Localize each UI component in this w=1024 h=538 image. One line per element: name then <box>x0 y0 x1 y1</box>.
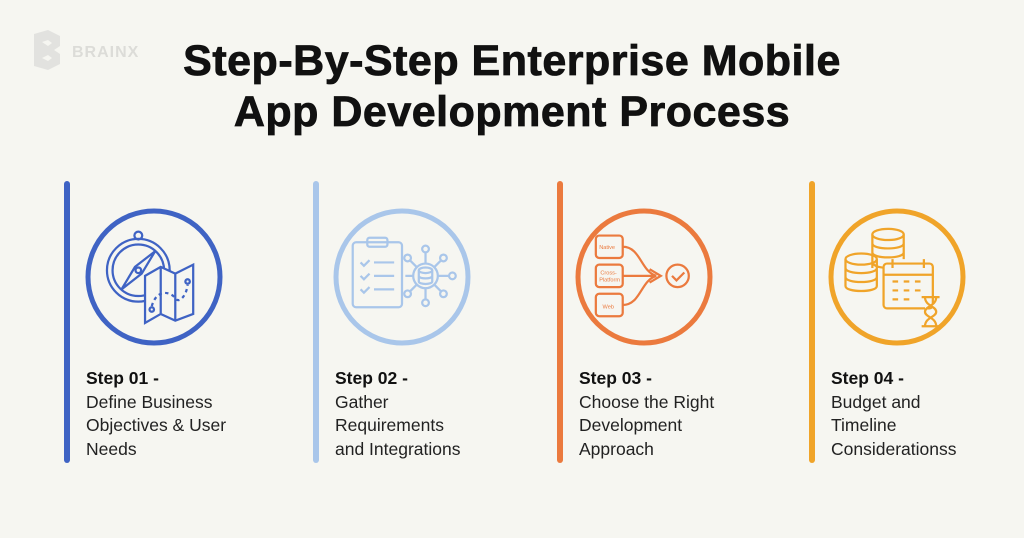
text: step 3 <box>579 368 714 458</box>
icon: coins and calendar <box>828 208 966 346</box>
text: step 3: Step 03 - <box>579 368 652 388</box>
text: step 4: Timeline <box>831 415 896 435</box>
panel: step 3 <box>557 181 714 463</box>
icon: development approaches: Platform <box>599 277 620 283</box>
icon: development approaches: Web <box>603 304 614 310</box>
logo: BRAINX <box>72 44 139 61</box>
text: step 1: Needs <box>86 438 137 458</box>
icon: development approaches: Native <box>599 245 615 251</box>
text: step 1: Step 01 - <box>86 368 159 388</box>
title <box>183 37 841 136</box>
text: step 2: Step 02 - <box>335 368 408 388</box>
text: step 3: Choose the Right <box>579 392 714 412</box>
text: step 2 <box>335 368 461 458</box>
text: step 4: Step 04 - <box>831 368 904 388</box>
text: step 2: Requirements <box>335 415 444 435</box>
icon: clipboard and database <box>334 208 470 346</box>
icon: development approaches: Cross- <box>600 271 617 277</box>
text: step 3: Approach <box>579 438 654 458</box>
text: step 1: Define Business <box>86 392 212 412</box>
icon: compass and map <box>86 208 222 346</box>
title: App Development Process <box>234 88 790 136</box>
text: step 4: Budget and <box>831 392 921 412</box>
title: Step-By-Step Enterprise Mobile <box>183 37 841 85</box>
text: step 4 <box>831 368 956 458</box>
panel: step 1 <box>64 181 226 463</box>
logo <box>34 30 139 70</box>
panel: step 2 <box>313 181 470 463</box>
text: step 3: Development <box>579 415 682 435</box>
text: step 2: and Integrations <box>335 438 461 458</box>
text: step 1: Objectives & User <box>86 415 226 435</box>
text: step 1 <box>86 368 226 458</box>
text: step 4: Considerationss <box>831 438 956 458</box>
text: step 2: Gather <box>335 392 388 412</box>
icon: development approaches <box>576 208 712 346</box>
panel: step 4 <box>809 181 966 463</box>
